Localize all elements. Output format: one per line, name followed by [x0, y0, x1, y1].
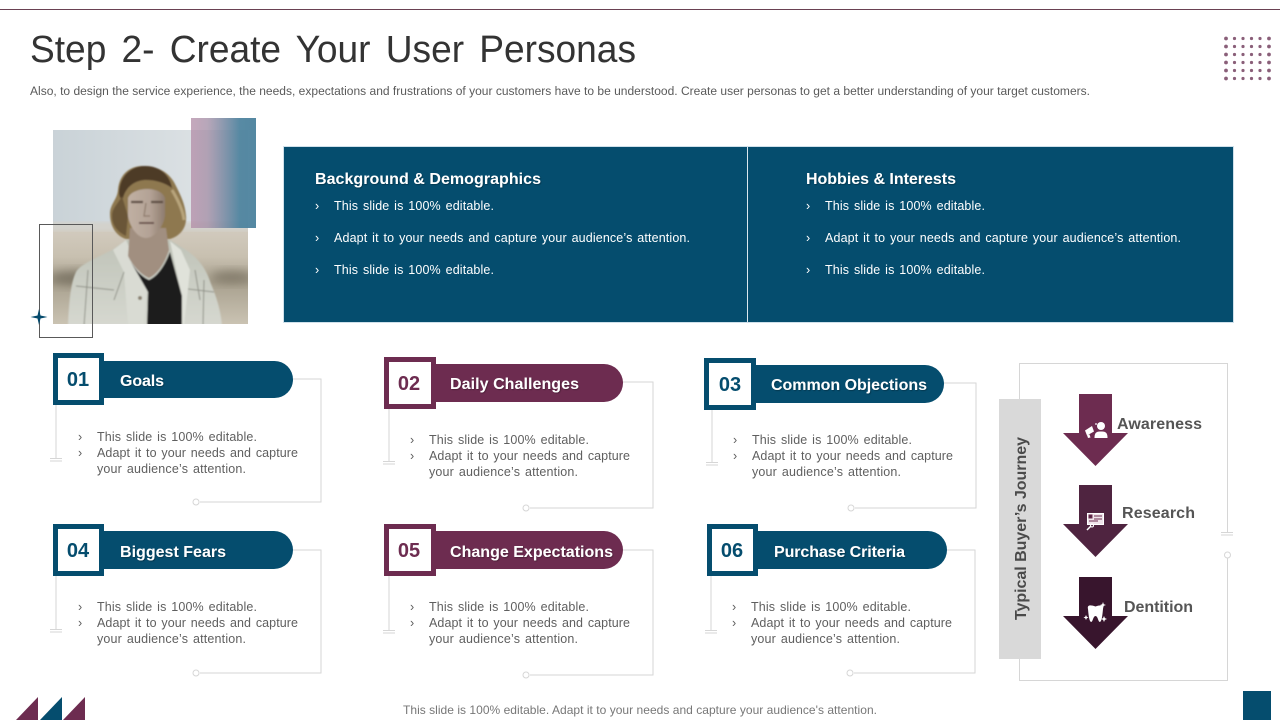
card 05: change expectations: › — [410, 616, 414, 630]
outline rectangle — [40, 224, 92, 338]
card 02: daily challenges: Adapt it to your needs and capture — [429, 449, 630, 463]
list: background and demographics: › — [315, 231, 319, 245]
card 01: goals — [50, 356, 321, 505]
card 04: biggest fears: This slide is 100% editable. — [97, 600, 257, 614]
persona photo — [48, 127, 254, 328]
card 03: common objections: › — [733, 433, 737, 447]
heading: hobbies and interests: Hobbies & Interests — [806, 171, 956, 188]
card 01: goals: Goals — [120, 373, 164, 390]
card 06: purchase criteria: 06 — [721, 540, 743, 562]
hair back — [110, 166, 186, 239]
card 01: goals: This slide is 100% editable. — [97, 430, 257, 444]
list: hobbies and interests — [806, 199, 1181, 277]
card 02: daily challenges: › — [410, 449, 414, 463]
label: awareness: Awareness — [1117, 416, 1202, 433]
neck — [128, 228, 169, 278]
card 05: change expectations: Adapt it to your needs and capture — [429, 616, 630, 630]
card 04: biggest fears: › — [78, 616, 82, 630]
list: background and demographics: Adapt it to your needs and capture your audience’s attention. — [334, 231, 690, 245]
card 04: biggest fears: Biggest Fears — [120, 544, 226, 561]
shirt — [128, 252, 182, 326]
card 02: daily challenges: This slide is 100% editable. — [429, 433, 589, 447]
card 05: change expectations — [383, 526, 653, 678]
card 02: daily challenges — [383, 360, 653, 511]
card 01: goals: › — [78, 446, 82, 460]
card 03: common objections: your audience’s attention. — [752, 465, 901, 479]
hair top — [119, 166, 172, 199]
icon: megaphone and person — [1085, 422, 1108, 438]
card 03: common objections: This slide is 100% editable. — [752, 433, 912, 447]
card 04: biggest fears: Adapt it to your needs and capture — [97, 616, 298, 630]
gradient overlay square — [191, 118, 256, 228]
footer square — [1243, 691, 1271, 720]
card 05: change expectations: › — [410, 600, 414, 614]
arrow: awareness — [1063, 394, 1128, 466]
card 05: change expectations: your audience’s attention. — [429, 632, 578, 646]
list: hobbies and interests: This slide is 100% editable. — [825, 263, 985, 277]
footer triangles — [16, 697, 85, 720]
list: background and demographics: This slide is 100% editable. — [334, 263, 494, 277]
star accent — [30, 309, 48, 325]
list: hobbies and interests: › — [806, 199, 810, 213]
card 02: daily challenges: Daily Challenges — [450, 376, 579, 393]
jacket — [68, 240, 222, 326]
decorative dot grid — [1224, 37, 1271, 80]
card 02: daily challenges: 02 — [398, 373, 420, 395]
card 04: biggest fears: your audience’s attention. — [97, 632, 246, 646]
icon: research board — [1087, 514, 1104, 530]
card 05: change expectations: Change Expectations — [450, 544, 613, 561]
list: background and demographics: This slide is 100% editable. — [334, 199, 494, 213]
card 06: purchase criteria: your audience’s attention. — [751, 632, 900, 646]
card 06: purchase criteria: › — [732, 616, 736, 630]
card 01: goals: your audience’s attention. — [97, 462, 246, 476]
card 05: change expectations: This slide is 100% editable. — [429, 600, 589, 614]
card 03: common objections: 03 — [719, 374, 741, 396]
card 03: common objections: › — [733, 449, 737, 463]
arrow: dentition — [1063, 577, 1128, 649]
list: background and demographics: › — [315, 199, 319, 213]
card 03: common objections: Adapt it to your needs and capture — [752, 449, 953, 463]
label: research: Research — [1122, 505, 1195, 522]
list: hobbies and interests: › — [806, 263, 810, 277]
card 02: daily challenges: › — [410, 433, 414, 447]
card 04: biggest fears — [50, 526, 321, 676]
list: background and demographics — [315, 199, 690, 277]
card 06: purchase criteria: › — [732, 600, 736, 614]
card 04: biggest fears: › — [78, 600, 82, 614]
card 03: common objections — [706, 360, 976, 511]
list: hobbies and interests: Adapt it to your needs and capture your audience’s attention. — [825, 231, 1181, 245]
list: background and demographics: › — [315, 263, 319, 277]
card 06: purchase criteria: Adapt it to your needs and capture — [751, 616, 952, 630]
face — [128, 189, 165, 238]
list: hobbies and interests: This slide is 100% editable. — [825, 199, 985, 213]
card 06: purchase criteria: Purchase Criteria — [774, 544, 905, 561]
card 04: biggest fears: 04 — [67, 540, 90, 562]
footer note: This slide is 100% editable. Adapt it to your needs and capture your audience's attention. — [403, 703, 877, 717]
icon: tooth with sparkles — [1084, 602, 1107, 622]
card 05: change expectations: 05 — [398, 540, 420, 562]
card 01: goals: › — [78, 430, 82, 444]
card 01: goals: 01 — [67, 369, 89, 391]
card 06: purchase criteria — [705, 526, 975, 676]
journey label: Typical Buyer’s Journey — [1013, 437, 1030, 620]
card 06: purchase criteria: This slide is 100% editable. — [751, 600, 911, 614]
card 01: goals: Adapt it to your needs and capture — [97, 446, 298, 460]
label: dentition: Dentition — [1124, 599, 1193, 616]
subtitle: Also, to design the service experience, the needs, expectations and frustrations of your customers have to be understood. Create user personas to get a better understanding of your target customers. — [30, 84, 1090, 98]
card 03: common objections: Common Objections — [771, 377, 927, 394]
arrow: research — [1063, 485, 1128, 557]
title: Step 2- Create Your User Personas — [30, 29, 636, 71]
heading: background and demographics: Background & Demographics — [315, 171, 541, 188]
panel: background and hobbies — [284, 146, 1234, 322]
top rule — [0, 9, 1280, 10]
list: hobbies and interests: › — [806, 231, 810, 245]
panel: typical buyer's journey — [999, 364, 1233, 680]
card 02: daily challenges: your audience’s attention. — [429, 465, 578, 479]
